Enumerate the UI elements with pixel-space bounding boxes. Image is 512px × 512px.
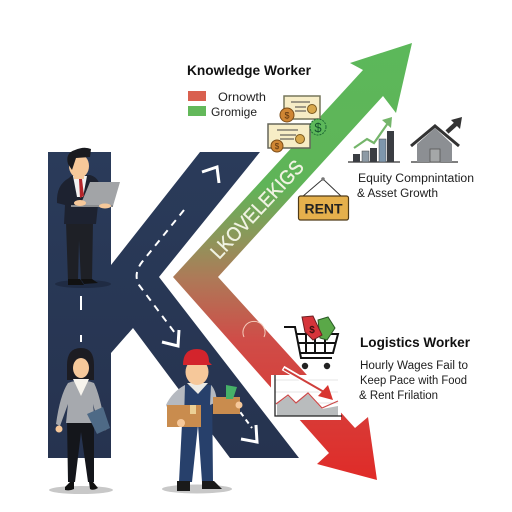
person: logistics worker with boxes: [162, 349, 242, 494]
icon: house with up arrow: [411, 117, 462, 162]
text: hourly wages: Hourly Wages Fail to: [360, 360, 468, 372]
text: equity compensation: [357, 173, 474, 200]
icon: certificates and coins: $: [284, 110, 290, 120]
person: woman with folder: [49, 348, 113, 494]
icon: certificates and coins: $: [314, 120, 322, 135]
icon: rent sign: [298, 177, 348, 220]
title: Logistics Worker: Logistics Worker: [360, 334, 471, 350]
text: hourly wages: [359, 360, 468, 402]
chevron arrow: green up, red down: [173, 43, 412, 480]
legend: [188, 90, 266, 119]
text: equity compensation: & Asset Growth: [357, 188, 438, 200]
title: Knowledge Worker: Knowledge Worker: [187, 62, 312, 78]
icon: certificates and coins: [268, 96, 326, 152]
line chart falling: [271, 368, 342, 420]
text: hourly wages: Keep Pace with Food: [360, 375, 467, 387]
navy K shape: [48, 152, 299, 458]
icon: bar chart with growth arrow: [348, 117, 400, 162]
arrow label: LKOVELEKIGS: [207, 156, 309, 263]
legend: Ornowth: [218, 90, 266, 104]
icon: certificates and coins: $: [275, 142, 280, 151]
icon: rent sign: RENT: [304, 200, 343, 216]
icon: shopping cart with price tags: [284, 316, 338, 369]
legend: Gromige: [211, 105, 257, 119]
person: knowledge worker with laptop: [55, 148, 120, 288]
text: hourly wages: & Rent Frilation: [359, 390, 438, 402]
text: equity compensation: Equity Compnintation: [358, 173, 474, 185]
icon: shopping cart with price tags: $: [309, 325, 315, 336]
